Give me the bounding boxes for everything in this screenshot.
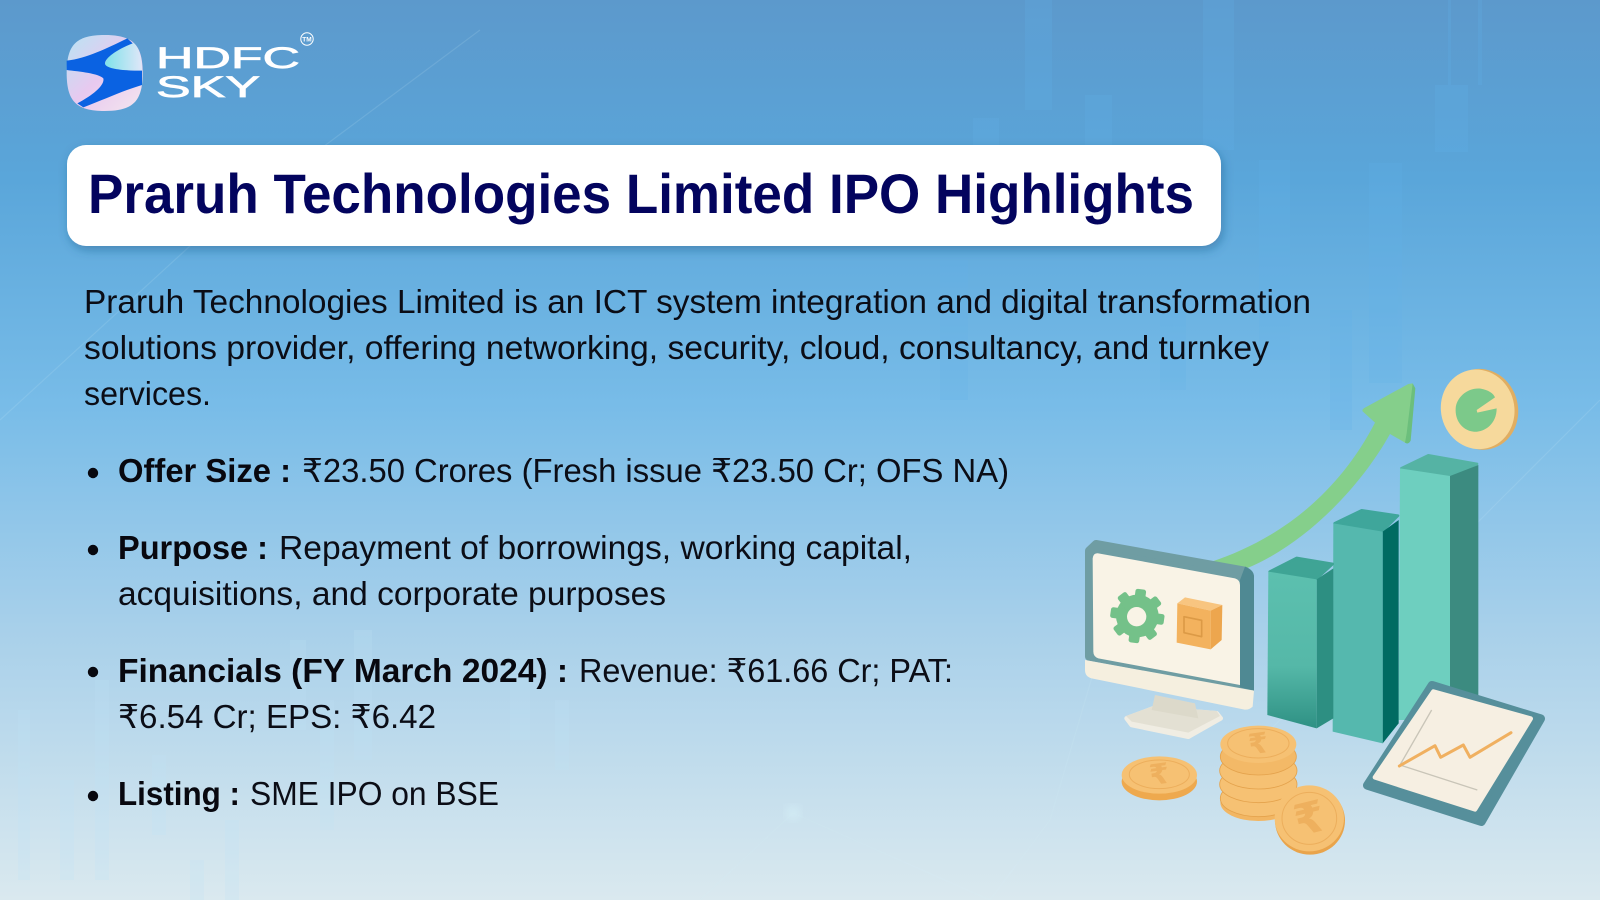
icon: gear xyxy=(1110,589,1165,643)
bar: tall xyxy=(1399,455,1478,720)
monitor stand xyxy=(1126,695,1221,737)
bullet: purpose: Purpose : xyxy=(118,529,268,566)
arrow: growth xyxy=(1212,383,1415,568)
trademark xyxy=(301,33,313,45)
coin: large xyxy=(1275,785,1345,855)
bullet: listing: SME IPO on BSE xyxy=(250,775,499,812)
bullet: financials xyxy=(88,652,953,735)
intro paragraph xyxy=(84,283,1311,412)
coin: flat xyxy=(1122,756,1197,800)
logo wordmark HDFC: HDFC xyxy=(156,42,300,75)
bar: short xyxy=(1267,558,1333,728)
icon: orange cube xyxy=(1177,597,1222,649)
title banner: Praruh Technologies Limited IPO Highlights xyxy=(88,162,1194,225)
bullet: purpose: Repayment of borrowings, working capital, xyxy=(279,529,912,566)
bullet: offer size: Offer Size : xyxy=(118,452,291,489)
coin stack: ₹ xyxy=(1246,727,1270,762)
tablet xyxy=(1367,685,1541,822)
intro paragraph: services. xyxy=(84,375,211,412)
intro paragraph: solutions provider, offering networking, security, cloud, consultancy, and turnkey xyxy=(84,329,1270,366)
icon: pie badge xyxy=(1432,361,1527,458)
bullet: listing: Listing : xyxy=(118,775,240,812)
intro paragraph: Praruh Technologies Limited is an ICT system integration and digital transformation xyxy=(84,283,1311,320)
bullet: purpose xyxy=(88,529,912,612)
bullet: financials: Revenue: ₹61.66 Cr; PAT: xyxy=(579,652,953,689)
trademark: TM xyxy=(302,36,312,43)
icon: logo mark xyxy=(67,35,143,111)
bar: middle xyxy=(1333,510,1399,743)
coin: flat: ₹ xyxy=(1147,758,1171,792)
bullet: offer size: ₹23.50 Crores (Fresh issue ₹23.50 Cr; OFS NA) xyxy=(302,452,1009,489)
bullet: financials: ₹6.54 Cr; EPS: ₹6.42 xyxy=(118,698,436,735)
illustration: growth chart, monitor, coins, tablet xyxy=(1085,361,1541,855)
bullet: listing xyxy=(88,775,499,812)
bullet: financials: Financials (FY March 2024) : xyxy=(118,652,568,689)
logo wordmark SKY: SKY xyxy=(156,71,261,104)
coin stack xyxy=(1220,726,1297,821)
bullet: purpose: acquisitions, and corporate purposes xyxy=(118,575,666,612)
bullet list xyxy=(88,452,1009,812)
logo: HDFC SKY xyxy=(67,33,313,111)
coin: large: ₹ xyxy=(1289,792,1330,846)
title banner xyxy=(67,145,1221,246)
monitor xyxy=(1085,544,1254,737)
